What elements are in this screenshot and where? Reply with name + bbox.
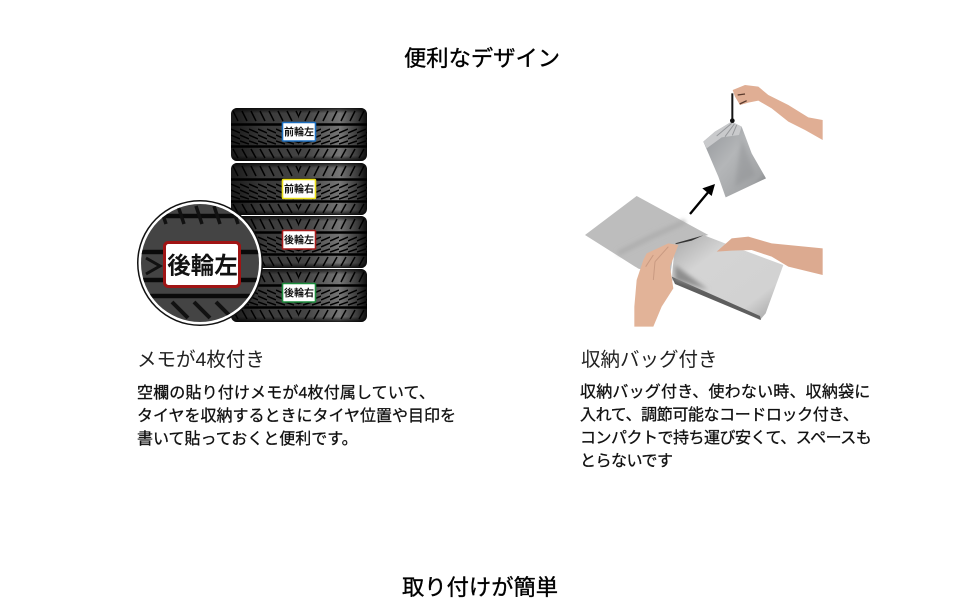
tire 2 [231, 163, 367, 215]
label: rear right [282, 284, 316, 302]
title: easy installation: 取り付けが簡単 [402, 575, 558, 600]
body text: memo: 空欄の貼り付けメモが4枚付属していて、 [137, 385, 435, 402]
label: front right [282, 180, 316, 198]
label: rear right: 後輪右 [284, 286, 314, 300]
title: design section: 便利なデザイン [404, 46, 560, 71]
arrow [690, 184, 715, 214]
body text: storage bag: とらないです [580, 453, 673, 470]
label: front left: 前輪左 [284, 126, 314, 138]
label: rear left [282, 230, 316, 249]
body text: storage bag: コンパクトで持ち運び安くて、スペースも [580, 430, 871, 447]
label: front right: 前輪右 [284, 182, 314, 196]
magnified circle with rear left label [137, 200, 263, 326]
unfolded cover fabric [585, 196, 708, 277]
body text: storage bag: 収納バッグ付き、使わない時、収納袋に [580, 384, 870, 401]
left hand [634, 243, 678, 327]
body text: memo [137, 384, 456, 448]
body text: memo: 書いて貼っておくと便利です。 [137, 431, 358, 448]
body text: storage bag: 入れて、調節可能なコードロック付き、 [580, 407, 858, 424]
label: front left [282, 122, 316, 141]
hanging arm [733, 85, 823, 140]
right hand [717, 237, 823, 275]
photo: storage bag and hands [585, 85, 823, 327]
magnified circle with rear left label: 後輪左 [167, 252, 238, 278]
body text: memo: タイヤを収納するときにタイヤ位置や目印を [137, 408, 456, 425]
drawstring cord [729, 93, 735, 121]
tire 3 [231, 216, 367, 268]
tire 4 [231, 269, 367, 322]
label: rear left: 後輪左 [284, 234, 314, 246]
storage bag [703, 118, 766, 197]
folded cover package [672, 235, 783, 320]
tire 1 [231, 108, 367, 161]
subheading: storage bag: 収納バッグ付き [581, 349, 718, 371]
subheading: memo: メモが4枚付き [137, 349, 265, 371]
illustration: stacked tires and storage photo [137, 85, 823, 327]
body text: storage bag [580, 383, 871, 470]
